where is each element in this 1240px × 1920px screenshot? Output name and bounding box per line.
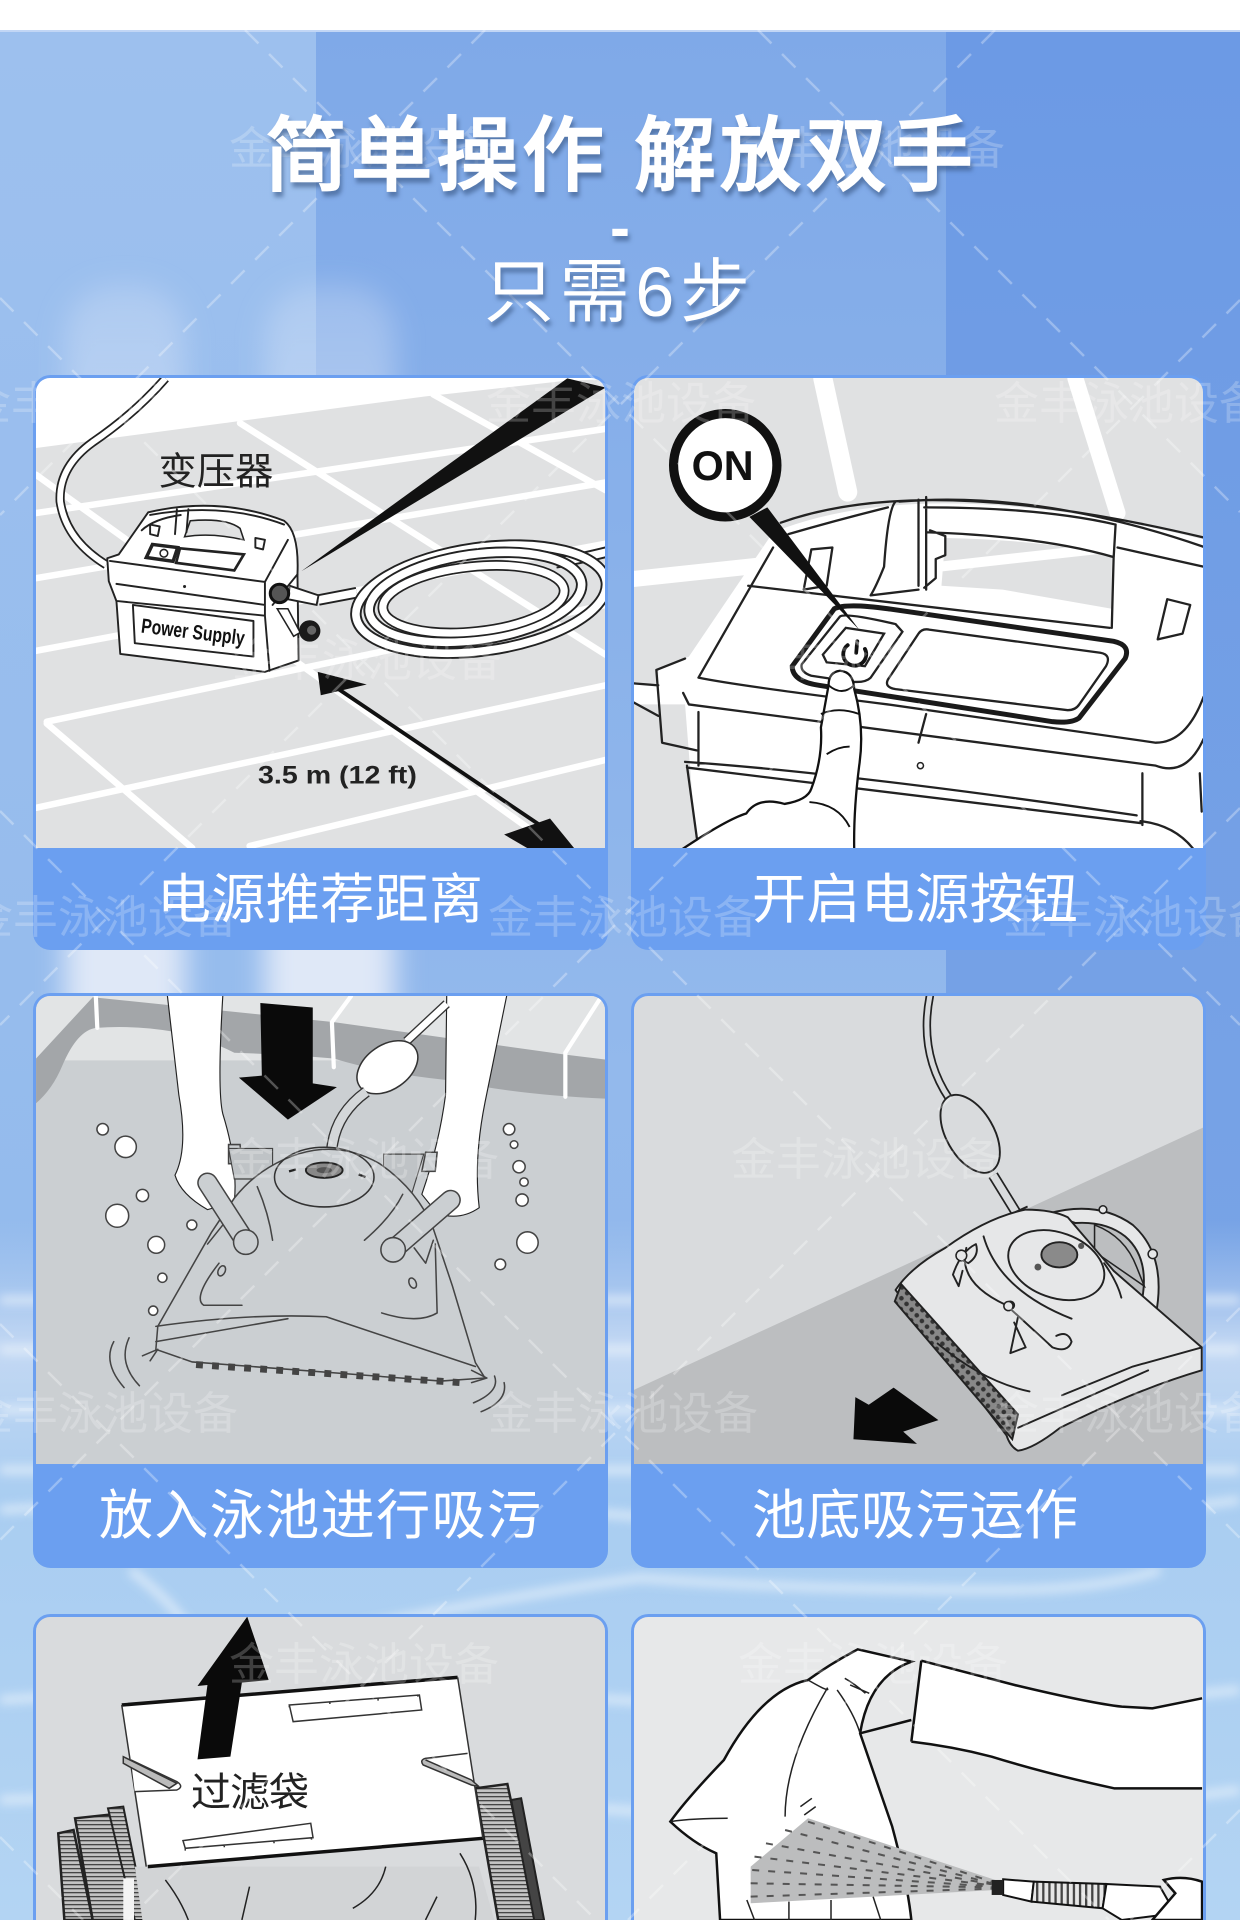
watermarks: 金丰泳池设备 — [735, 123, 1005, 174]
cord and float — [927, 995, 1033, 1225]
watermarks: 金丰泳池设备 — [731, 1134, 1001, 1185]
ripples — [110, 1338, 505, 1412]
panel: step 5 remove filter bag — [34, 1616, 606, 1920]
bubbles — [97, 1124, 538, 1315]
hand with pointing finger — [681, 671, 861, 850]
illustration: lifting filter bag — [36, 1617, 606, 1920]
robot cleaner — [142, 1145, 487, 1383]
panel: step 4 pool floor operation — [631, 994, 1204, 1566]
illustration: hands lowering cleaner into water — [36, 994, 606, 1466]
arrow: movement direction — [853, 1388, 938, 1444]
device body — [634, 497, 1206, 850]
separator dash: - — [610, 194, 630, 261]
illustration: finger pressing on button — [634, 376, 1206, 856]
panel: step 1 power distance — [34, 376, 613, 948]
watermarks: 金丰泳池设备 — [488, 1388, 758, 1439]
icon: long black pointer wedge — [301, 378, 606, 571]
power supply box — [107, 506, 320, 672]
spray nozzle and hand — [992, 1878, 1202, 1920]
power supply box: Power Supply — [140, 615, 246, 650]
watermarks: 金丰泳池设备 — [229, 1134, 499, 1185]
illustration: hosing filter bag — [634, 1617, 1204, 1920]
main heading: 简单操作 解放双手 — [265, 111, 973, 202]
watermarks: 金丰泳池设备 — [229, 1639, 499, 1690]
caption: 开启电源按钮 — [752, 870, 1078, 930]
robot cleaner — [895, 1206, 1202, 1451]
panel: step 6 rinse filter bag — [632, 1616, 1204, 1920]
caption: 池底吸污运作 — [752, 1486, 1078, 1546]
watermarks: 金丰泳池设备 — [232, 635, 502, 686]
arrow: 3.5 m distance — [318, 672, 575, 849]
watermarks: 金丰泳池设备 — [229, 123, 499, 174]
filter bag — [123, 1853, 494, 1920]
left track — [58, 1807, 146, 1920]
arrow: lift up — [198, 1617, 269, 1759]
arm — [860, 1661, 1202, 1788]
illustration: cleaner moving on pool floor — [631, 994, 1204, 1466]
filter bag — [670, 1649, 911, 1920]
watermarks: 金丰泳池设备 — [486, 378, 756, 429]
arrow: down — [239, 1003, 337, 1120]
hose and float — [332, 1004, 447, 1148]
subheading: 只需6步 — [484, 253, 750, 331]
illustration: power supply on tiled deck — [36, 376, 613, 856]
panel: step 3 place into pool — [34, 994, 606, 1566]
watermarks: 金丰泳池设备 — [735, 635, 1005, 686]
callout: ON — [674, 414, 859, 630]
watermarks: 金丰泳池设备 — [488, 892, 758, 943]
callout: ON: ON — [692, 443, 754, 489]
right track — [475, 1784, 544, 1920]
title — [265, 111, 973, 331]
water spray — [751, 1818, 996, 1903]
icon: power symbol — [843, 641, 866, 666]
caption: 电源推荐距离 — [157, 870, 483, 930]
label: filter bag: 过滤袋 — [191, 1771, 309, 1815]
panel: step 2 power button — [632, 376, 1206, 948]
filter plate — [122, 1677, 483, 1867]
label: distance: 3.5 m (12 ft) — [258, 761, 417, 789]
cable from wall — [60, 378, 165, 565]
watermarks: 金丰泳池设备 — [738, 1639, 1008, 1690]
label: transformer: 变压器 — [159, 450, 273, 493]
coiled hose — [318, 539, 605, 659]
control panel — [792, 606, 1127, 722]
arms — [167, 995, 507, 1216]
caption: 放入泳池进行吸污 — [99, 1486, 541, 1546]
